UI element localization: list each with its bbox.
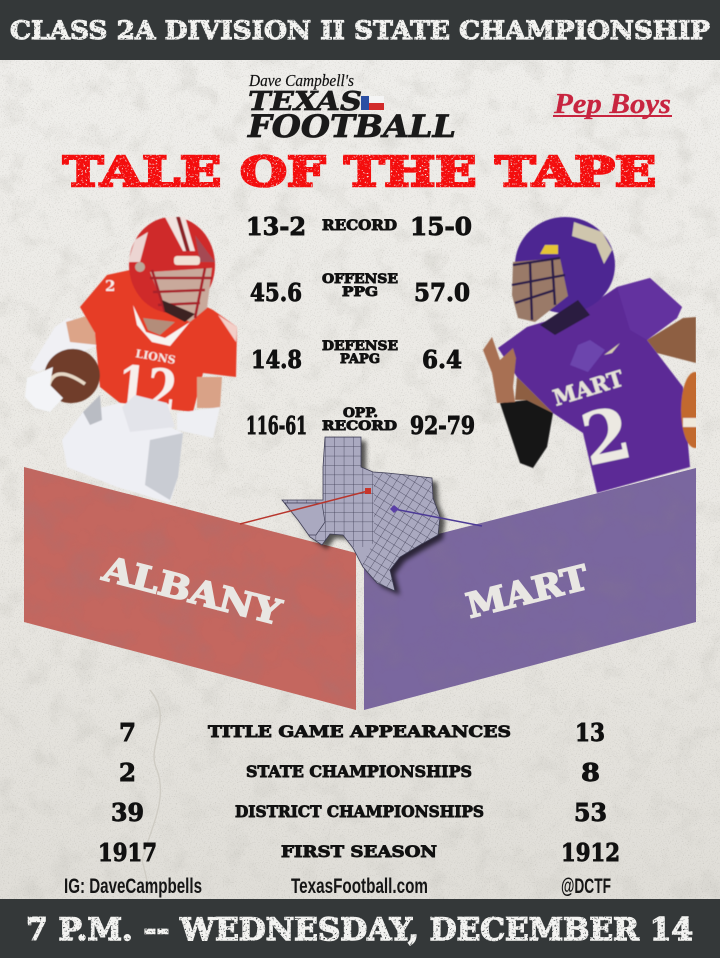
first season row: 1917 [98,838,157,867]
opponent record row: 116-61 [246,411,307,440]
first season row: FIRST SEASON [281,842,437,861]
Albany name: ALBANY [98,549,286,634]
opponent record row: RECORD [322,419,397,434]
district championships row: 39 [111,798,144,827]
Albany marker and line [240,488,371,524]
football [680,371,696,449]
player: Albany: LIONS [134,347,177,367]
first season row [98,838,620,867]
player: Mart: MART [550,366,627,412]
logo: Dave Campbell's Texas Football: FOOTBALL [247,109,456,145]
title game appearances row: 13 [575,718,605,747]
defense row: PAPG [340,352,380,367]
pants [62,403,183,503]
player: Mart [483,217,709,493]
social handles: @DCTF [561,875,611,898]
offense row: OFFENSE [322,272,398,287]
logo: Pep Boys: Pep Boys [553,88,671,120]
player: Albany: 2 [105,277,115,295]
bottom banner [0,899,720,958]
jersey [498,278,690,493]
game time and date: 7 P.M. -- WEDNESDAY, DECEMBER 14 [26,912,693,948]
state championships row [119,758,600,787]
banner heading: CLASS 2A DIVISION II STATE CHAMPIONSHIP [10,16,710,45]
district championships row: DISTRICT CHAMPIONSHIPS [235,802,484,821]
record row: RECORD [322,218,397,234]
defense row: 6.4 [422,345,462,374]
comparison table [98,718,620,867]
title: TALE OF THE TAPE [63,148,656,196]
helmet [515,217,615,313]
district championships row [111,798,607,827]
right arm [647,317,696,363]
football [36,341,108,411]
opponent record row: OPP. [343,406,378,421]
opponent record row [246,406,475,440]
stat rows: tale of the tape [246,212,475,440]
jersey [80,270,237,412]
social handles: IG: DaveCampbells [64,875,202,898]
social handles: TexasFootball.com [291,875,428,898]
player: Albany: 12 [114,352,180,426]
first season row: 1912 [561,838,620,867]
logo: Dave Campbell's Texas Football [247,71,456,145]
logo: Dave Campbell's Texas Football: TEXAS [248,87,362,117]
gloves and right arm [25,367,63,412]
player: Albany [25,217,237,503]
offense row: 45.6 [250,278,302,307]
left arm [30,318,98,372]
logo: Dave Campbell's Texas Football: Dave Campbell's [248,71,354,90]
social handles [64,875,611,898]
Mart name: MART [462,558,592,627]
state championships row: STATE CHAMPIONSHIPS [246,762,472,781]
map of Texas with school locations [240,437,482,600]
black sleeve [500,400,553,468]
defense row: 14.8 [251,345,302,374]
offense row: 57.0 [414,278,470,307]
offense row: PPG [342,285,378,300]
panel: Albany [24,467,356,710]
record row: 15-0 [410,212,472,241]
state championships row: 8 [581,758,600,787]
defense row: DEFENSE [322,339,398,354]
state championships row: 2 [119,758,136,787]
defense row [251,339,462,374]
player: Mart: 2 [574,390,638,483]
record row [246,212,472,241]
district championships row: 53 [574,798,607,827]
title game appearances row: 7 [119,718,136,747]
Mart marker and line [390,505,482,526]
title game appearances row [119,718,605,747]
record row: 13-2 [246,212,306,241]
panel: Mart [364,468,696,710]
helmet [129,217,215,313]
opponent record row: 92-79 [410,411,475,440]
top banner [0,0,720,60]
offense row [250,272,470,307]
title game appearances row: TITLE GAME APPEARANCES [208,722,511,741]
hand [483,337,516,403]
